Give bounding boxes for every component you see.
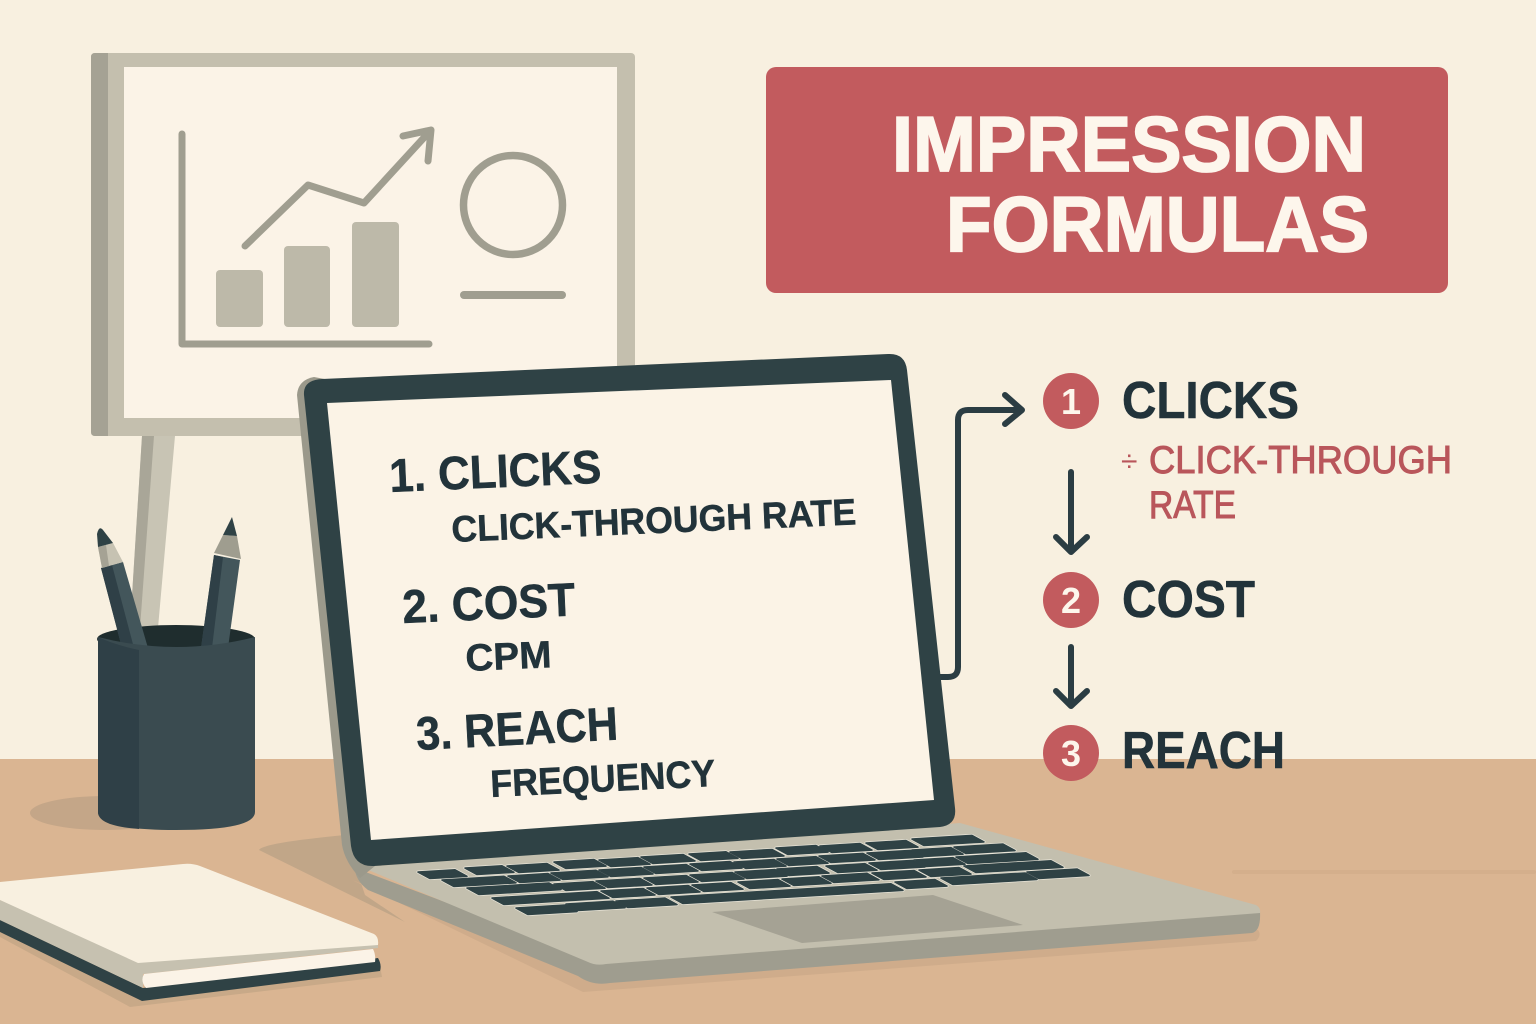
screen item 2 detail: CPM [465,634,552,680]
wall background [0,0,1536,760]
base shadow [352,880,1260,992]
trackpad [712,895,1023,943]
bar: large [352,222,399,327]
step 1 formula: ÷ [1121,445,1137,478]
title text: IMPRESSION [892,100,1366,188]
title text [892,100,1369,268]
step 1 formula: CLICK-THROUGH [1149,439,1452,482]
base side [355,868,1260,984]
laptop lid [297,354,955,878]
notebook shadow [0,925,382,1007]
step 1 badge [1043,373,1099,429]
title banner [766,67,1448,293]
circle icon [464,156,562,254]
notebook [0,864,382,1007]
step 1 label: CLICKS [1122,372,1299,430]
notebook top cover [0,864,378,963]
underline [464,291,562,299]
step 2 badge [1043,572,1099,628]
notebook pages [0,900,378,988]
step 3 badge [1043,725,1099,781]
screen item 3 detail: FREQUENCY [489,753,716,806]
step 3 label: REACH [1122,722,1285,780]
screen list text [388,440,857,806]
screen item 2 title: 2. COST [401,572,577,633]
notebook back cover [0,920,381,1001]
desk surface [0,759,1536,1024]
laptop desk shadow [259,835,405,922]
step 1 formula: RATE [1149,484,1236,527]
arrow: step 1 to step 2 [1056,472,1087,552]
rising trend arrow [245,130,431,246]
left pencil [97,528,148,648]
connector arrow from laptop to list [940,395,1022,677]
arrow: step 2 to step 3 [1056,647,1087,706]
lid bezel [304,354,955,866]
pencil holder shadow [30,796,180,830]
screen item 1 detail: CLICK-THROUGH RATE [451,491,857,550]
screen item 3 title: 3. REACH [415,696,619,760]
right pencil [201,517,241,648]
pencil holder body [98,637,255,830]
chart axes [182,134,429,344]
step 2 badge: 2 [1061,580,1081,621]
step 1 formula [1121,439,1452,527]
screen item 1 title: 1. CLICKS [388,440,602,502]
base top deck [361,823,1260,965]
keyboard [418,835,1089,914]
whiteboard with chart [91,53,635,436]
laptop base [352,823,1260,992]
lid outer edge [297,377,375,878]
screen [327,380,934,840]
bar: medium [284,246,330,327]
pencil holder back rim [97,625,255,653]
step 1 badge: 1 [1061,381,1081,422]
step 3 badge: 3 [1061,733,1081,774]
step 2 label: COST [1122,571,1255,629]
whiteboard stand leg [130,436,175,628]
bar: small [216,270,263,327]
title text: FORMULAS [946,180,1369,268]
